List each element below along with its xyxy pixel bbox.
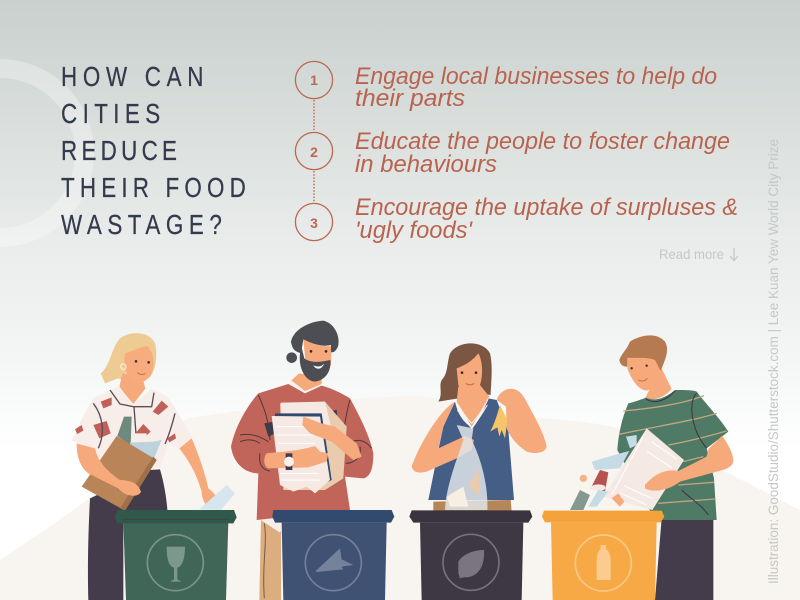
title: HOW CAN [61,62,203,93]
decorative ring [0,68,84,238]
timeline of numbered steps: 3 [310,215,318,231]
timeline of numbered steps [295,61,333,241]
step texts: Educate the people to foster change [355,128,730,155]
title: CITIES [61,99,160,130]
step texts: 'ugly foods' [355,217,473,244]
step texts: their parts [355,85,465,112]
title: REDUCE [61,136,177,167]
step texts: Engage local businesses to help do [355,63,717,90]
step texts: Encourage the uptake of surpluses & [355,194,738,221]
read more link: Read more [659,246,724,262]
person 4: man with stripes emptying tray into orange plastic bin [542,335,733,600]
title: WASTAGE? [61,210,222,241]
image credit: Illustration: GoodStudio/Shutterstock.com | Lee Kuan Yew World City Prize [766,139,781,584]
person 3: woman with banana peel, food bag and dark compost bin [409,343,547,600]
timeline of numbered steps: 2 [310,144,318,160]
timeline of numbered steps: 1 [310,72,318,88]
background hill [0,396,800,600]
step texts: in behaviours [355,151,497,178]
step texts [355,63,738,244]
person 1: blonde woman with bag and green glass bin [72,333,237,600]
title: THEIR FOOD [61,173,246,204]
title [61,62,246,241]
person 2: bearded man with papers and blue paper bin [231,321,394,600]
